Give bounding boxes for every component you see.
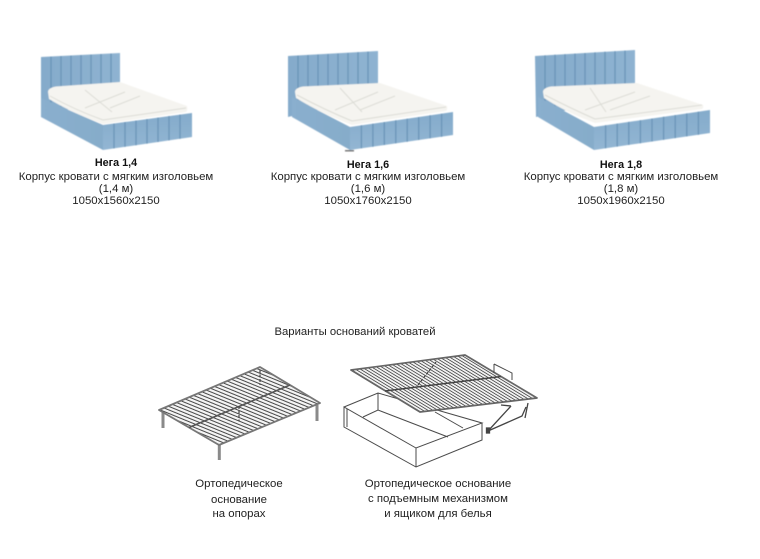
caption: Нега 1,4: (1,4 м) [99,183,133,195]
mattress [48,82,187,124]
headboard [41,53,120,117]
caption: Нега 1,8: 1050х1960х2150 [577,195,665,207]
caption: Нега 1,6 [271,159,465,207]
caption: base with lifting mechanism: Ортопедическое основание [365,478,511,490]
caption: Нега 1,6: (1,6 м) [351,183,385,195]
caption: base with lifting mechanism: с подъемным механизмом [368,493,508,505]
caption: base on legs: на опорах [212,508,266,520]
centre beam [385,376,501,391]
caption: Нега 1,8: (1,8 м) [604,183,638,195]
caption: base with lifting mechanism [365,478,511,520]
illustration: bed Нега 1,4 [41,53,192,150]
footboard [594,110,710,150]
illustration: bed Нега 1,8 [535,50,710,150]
footboard [350,112,453,150]
slatted frame lifted [351,355,537,412]
caption: Нега 1,6: Корпус кровати с мягким изголовьем [271,171,465,183]
caption: Нега 1,4 [19,157,213,207]
heading: base variants: Варианты оснований кроватей [274,326,436,338]
caption: Нега 1,8: Нега 1,8 [600,159,642,171]
caption: Нега 1,6: 1050х1760х2150 [324,195,412,207]
supports [239,370,260,421]
centre beam [189,385,290,428]
headboard [535,50,635,117]
bed side rail [292,97,350,150]
caption: base on legs: Ортопедическое [195,478,283,490]
caption: Нега 1,4: Корпус кровати с мягким изголовьем [19,171,213,183]
footboard [103,113,192,150]
bed foot [345,150,354,152]
caption: base on legs [195,478,283,520]
illustration: base with lifting mechanism and storage box [344,355,537,467]
caption: Нега 1,4: 1050х1560х2150 [72,195,160,207]
legs [162,405,318,460]
caption: base with lifting mechanism: и ящиком для белья [384,508,492,520]
storage box [344,393,482,467]
bed side rail [41,98,103,150]
caption: Нега 1,4: Нега 1,4 [95,157,137,169]
mattress [543,83,703,123]
caption: Нега 1,8: Корпус кровати с мягким изголовьем [524,171,718,183]
lifting strut [418,362,436,385]
mattress [295,83,447,125]
caption: Нега 1,6: Нега 1,6 [347,159,389,171]
illustration: bed Нега 1,6 [288,51,453,152]
caption: Нега 1,8 [524,159,718,207]
lifting mechanism [486,403,528,433]
illustration: orthopedic base on legs [159,367,320,460]
caption: base on legs: основание [211,494,267,506]
handle [494,364,512,380]
bed side rail [538,97,594,150]
slatted frame [159,367,320,445]
headboard [288,51,378,117]
